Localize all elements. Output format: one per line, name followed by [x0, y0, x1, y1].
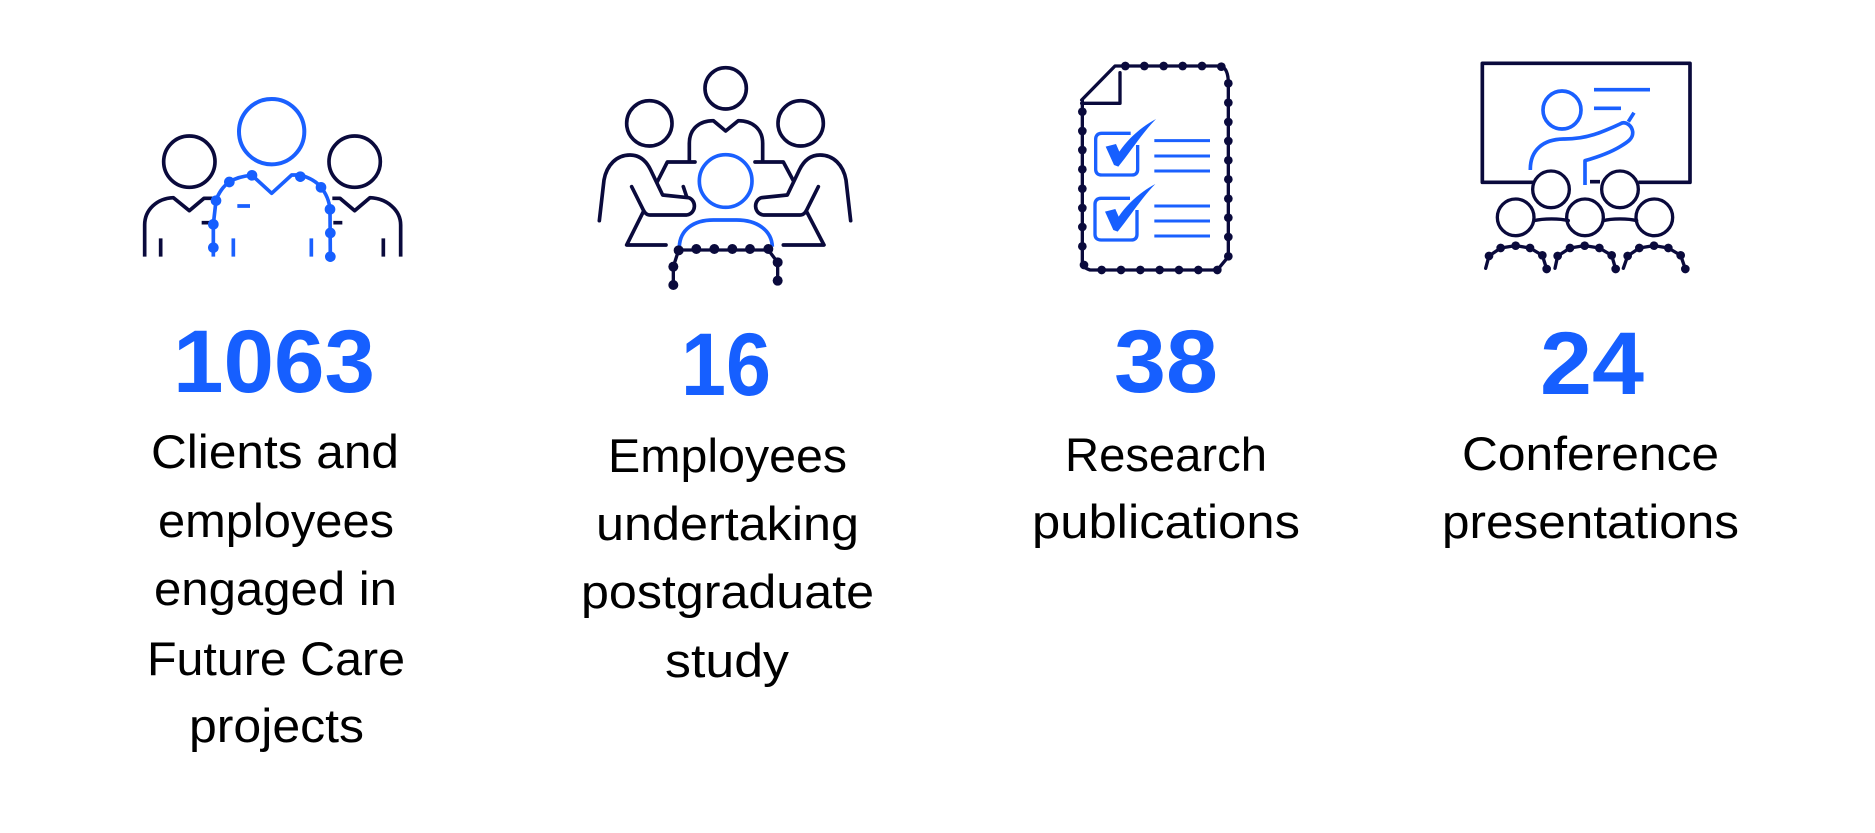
- text: postgraduate description: postgraduate: [581, 565, 874, 618]
- icon: three people: [145, 99, 401, 262]
- text: presentations description: [1442, 427, 1739, 548]
- text: clients description: engaged in: [154, 562, 397, 615]
- text: publications description: Research: [1065, 428, 1267, 481]
- text: clients description: Future Care: [147, 632, 405, 685]
- panel: clients and employees: [145, 99, 405, 752]
- text: presentations description: presentations: [1442, 495, 1739, 548]
- icon: presenter with audience: [1482, 63, 1690, 273]
- text: postgraduate description: undertaking: [596, 497, 859, 550]
- text: postgraduate description: Employees: [608, 429, 847, 482]
- text: clients description: projects: [189, 699, 364, 752]
- text: clients description: employees: [158, 494, 394, 547]
- text: clients description: Clients and: [151, 425, 399, 478]
- text: publications description: [1032, 428, 1300, 548]
- text: clients description: [147, 425, 405, 752]
- number: 16: 16: [681, 314, 771, 414]
- icon: checklist document: [1078, 62, 1233, 274]
- text: publications description: publications: [1032, 495, 1300, 548]
- text: postgraduate description: study: [665, 634, 790, 687]
- number: 38: 38: [1114, 311, 1218, 411]
- panel: research publications: [1032, 62, 1300, 548]
- text: postgraduate description: [581, 429, 874, 687]
- panel: postgraduate study: [581, 68, 874, 687]
- text: presentations description: Conference: [1462, 427, 1719, 480]
- number: 1063: 1063: [173, 311, 375, 411]
- panel: conference presentations: [1442, 63, 1739, 548]
- icon: people around a table: [599, 68, 851, 290]
- number: 24: 24: [1540, 313, 1645, 413]
